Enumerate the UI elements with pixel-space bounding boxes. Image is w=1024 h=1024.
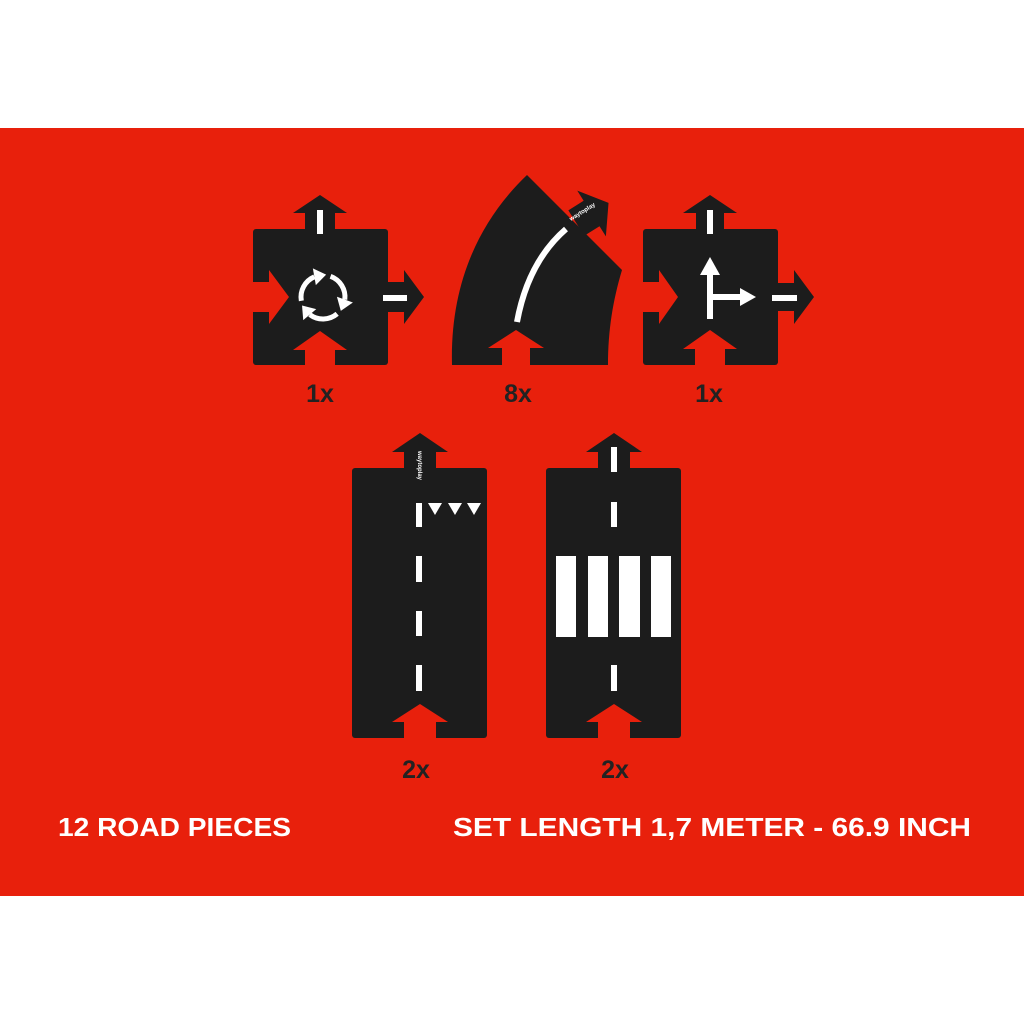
icon: roundabout arrows: [296, 266, 359, 333]
quantity labels: 1x: [695, 380, 723, 408]
piece: straight with give-way: [352, 433, 487, 740]
piece: straight with crosswalk: [546, 433, 681, 740]
piece: roundabout: [252, 195, 424, 367]
quantity labels: 2x: [402, 756, 430, 784]
quantity labels: 1x: [306, 380, 334, 408]
quantity labels: 2x: [601, 756, 629, 784]
piece: junction: [642, 195, 814, 366]
quantity labels: 8x: [504, 380, 532, 408]
piece: curve: waytoplay: [568, 202, 597, 223]
quantity labels: [306, 380, 723, 784]
footer texts: 12 ROAD PIECES: [58, 812, 291, 842]
icon: turn arrows: [700, 257, 756, 319]
piece: straight with give-way: waytoplay: [416, 450, 422, 481]
piece: curve: [452, 175, 623, 367]
red panel: [0, 128, 1024, 896]
footer texts: SET LENGTH 1,7 METER - 66.9 INCH: [453, 812, 971, 842]
footer texts: [58, 812, 971, 842]
